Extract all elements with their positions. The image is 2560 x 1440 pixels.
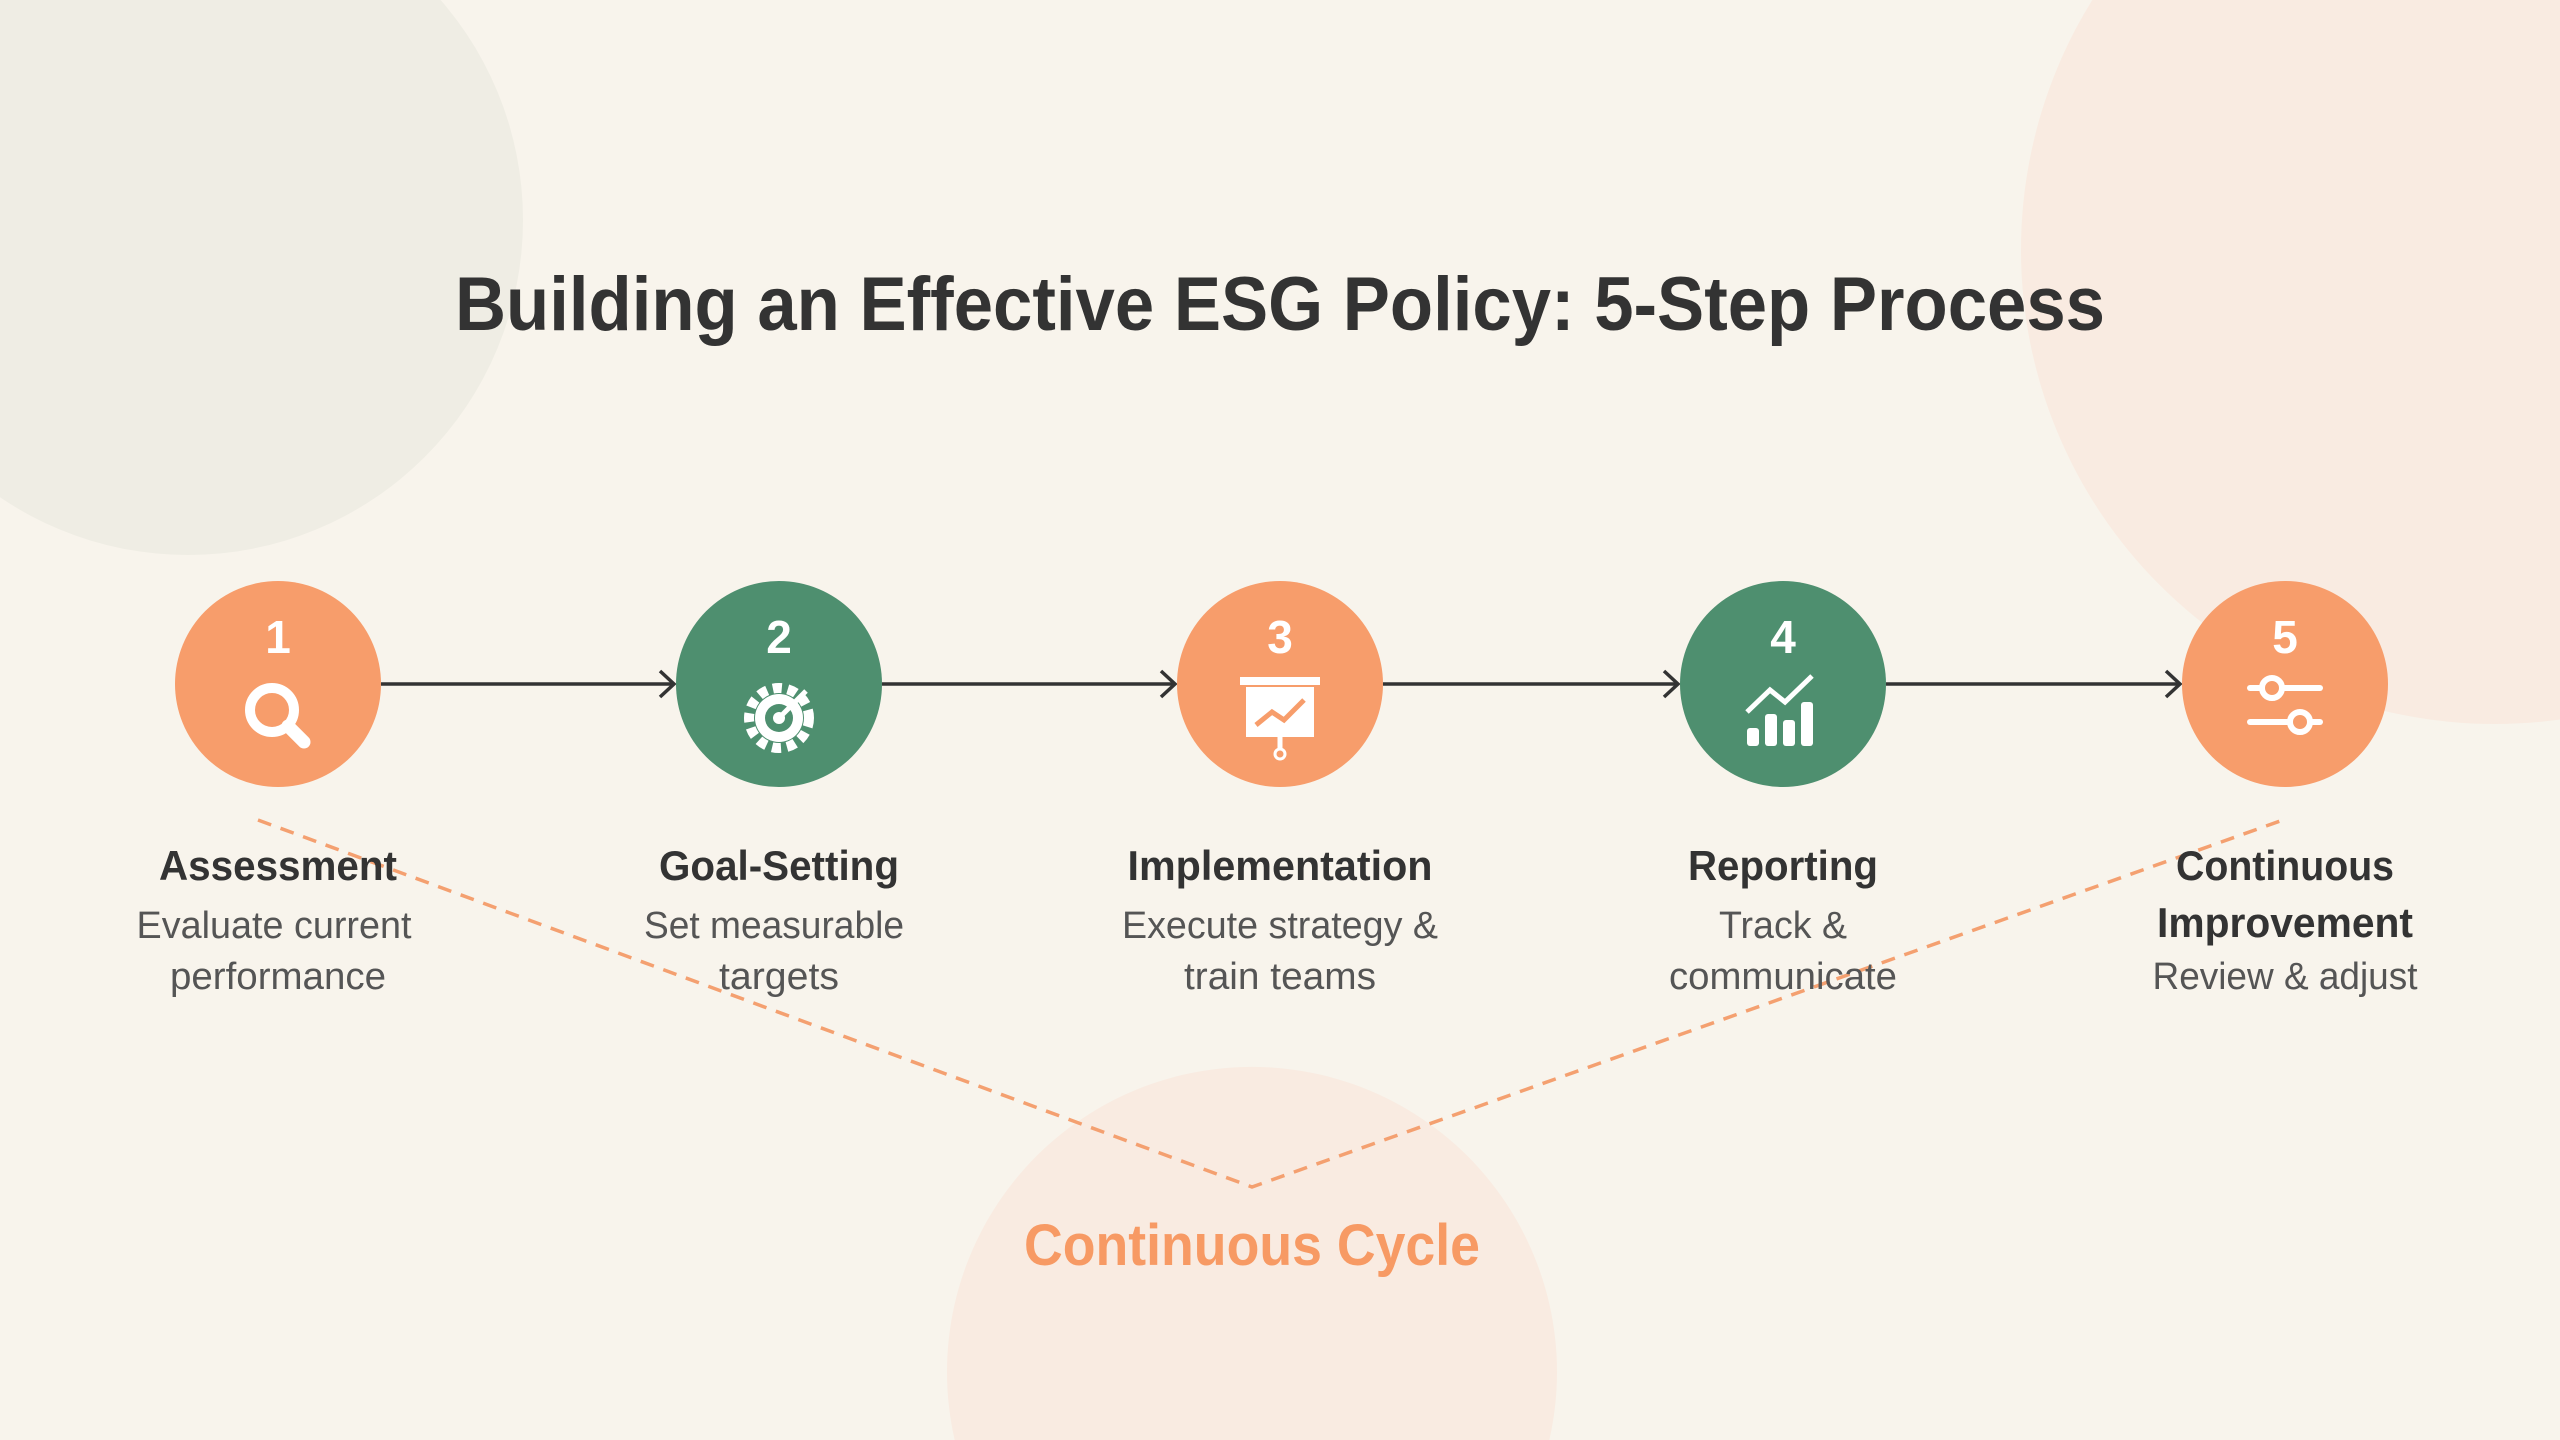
step 5: 5 xyxy=(2272,611,2298,663)
step 2: Set measurable xyxy=(644,905,904,947)
step 1: Assessment xyxy=(159,842,397,889)
step 3: Implementation xyxy=(1128,842,1432,889)
step 4: communicate xyxy=(1669,956,1897,998)
step 4: Track & xyxy=(1719,905,1847,947)
step 5: Review & adjust xyxy=(2152,956,2418,998)
arrows xyxy=(381,671,2180,697)
step 2 xyxy=(644,581,904,998)
step 1 xyxy=(136,581,412,998)
step 4: 4 xyxy=(1770,611,1796,663)
step 3: train teams xyxy=(1184,956,1376,998)
title: Building an Effective ESG Policy: 5-Step Process xyxy=(455,262,2105,347)
step 4: Reporting xyxy=(1688,842,1878,889)
step 5: Continuous xyxy=(2176,842,2394,889)
cycle dashed lines xyxy=(258,820,2283,1187)
step 3 xyxy=(1122,581,1438,998)
step 1: performance xyxy=(170,956,386,998)
step 1: 1 xyxy=(265,611,291,663)
step 2: targets xyxy=(719,956,839,998)
step 4 xyxy=(1669,581,1897,998)
step 3: 3 xyxy=(1267,611,1293,663)
step 1: Evaluate current xyxy=(136,905,412,947)
step 5 xyxy=(2152,581,2418,998)
step 2: 2 xyxy=(766,611,792,663)
step 3: Execute strategy & xyxy=(1122,905,1438,947)
step 5: Improvement xyxy=(2157,899,2413,946)
cycle label: Continuous Cycle xyxy=(1024,1213,1480,1278)
step 2: Goal-Setting xyxy=(659,842,899,889)
